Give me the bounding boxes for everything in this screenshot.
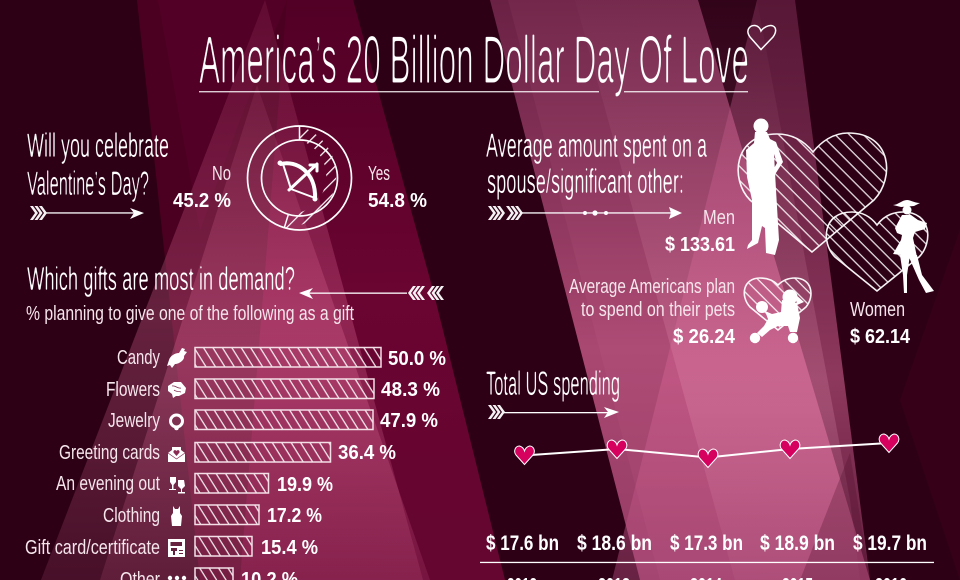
no value: No	[212, 163, 231, 185]
heading: average spend: spouse/significant other:	[487, 163, 684, 201]
arrow: celebrate	[30, 206, 144, 220]
women value	[850, 299, 911, 348]
heading: gifts: Which gifts are most in demand?	[27, 260, 295, 297]
no value	[173, 163, 231, 212]
women value: Women	[850, 299, 905, 321]
row: gift card	[25, 536, 318, 559]
pets text: to spend on their pets	[581, 299, 735, 321]
donut chart	[248, 126, 352, 230]
row: jewelry: 47.9 %	[380, 410, 438, 432]
pets text	[569, 276, 736, 348]
heart: women	[826, 212, 928, 291]
panel: gifts in demand	[25, 260, 446, 580]
icon: bow and arrow	[278, 161, 317, 201]
yes value: 54.8 %	[368, 190, 427, 212]
row: jewelry	[108, 410, 438, 432]
subheading: gifts: % planning to give one of the following as a gift	[26, 303, 354, 325]
panel: average spend	[486, 118, 934, 348]
heading: celebrate question: Will you celebrate	[27, 127, 169, 165]
row: greeting cards: Greeting cards	[59, 442, 160, 464]
women value: $ 62.14	[850, 326, 911, 348]
row: flowers	[106, 379, 440, 401]
year labels	[507, 575, 907, 580]
heading: average spend: Average amount spent on a	[486, 127, 707, 165]
men value	[665, 207, 735, 256]
row: gift card: Gift card/certificate	[25, 537, 160, 559]
line chart	[515, 434, 899, 468]
icon: man silhouette	[746, 118, 783, 255]
pets text: $ 26.24	[673, 326, 736, 348]
row: candy	[117, 347, 446, 370]
spending values	[486, 532, 927, 555]
spending values: $ 17.3 bn	[670, 532, 743, 555]
heading: celebrate question: Valentine’s Day?	[27, 165, 149, 203]
spending values: $ 18.6 bn	[577, 532, 652, 555]
men value: $ 133.61	[665, 234, 735, 256]
yes value	[368, 163, 427, 212]
row: flowers: 48.3 %	[381, 379, 440, 401]
row: flowers: Flowers	[106, 379, 160, 401]
row: clothing: 17.2 %	[267, 505, 322, 527]
heading: celebrate question	[27, 127, 169, 203]
yes value: Yes	[368, 163, 390, 185]
no value: 45.2 %	[173, 190, 231, 212]
row: candy: Candy	[117, 347, 160, 369]
arrow: total spending	[488, 405, 619, 419]
panel: will you celebrate	[27, 126, 427, 230]
row: jewelry: Jewelry	[108, 410, 160, 432]
pets text: Average Americans plan	[569, 276, 735, 298]
row: greeting cards	[59, 442, 396, 464]
row: gift card: 15.4 %	[261, 537, 318, 559]
row: clothing: Clothing	[103, 505, 160, 527]
row: candy: 50.0 %	[388, 348, 446, 370]
row: greeting cards: 36.4 %	[338, 442, 396, 464]
heading: average spend	[486, 127, 707, 201]
spending values: $ 18.9 bn	[760, 532, 835, 555]
spending values: $ 17.6 bn	[486, 532, 559, 555]
icon: poodle silhouette	[750, 290, 804, 343]
arrow: average spend	[488, 206, 682, 220]
arrow: gifts	[299, 286, 444, 300]
men value: Men	[703, 207, 735, 229]
panel: total US spending	[480, 365, 934, 580]
spending values: $ 19.7 bn	[853, 532, 927, 555]
heart: men	[738, 133, 887, 252]
heart: pets	[744, 278, 811, 330]
panel: total US spending: Total US spending	[486, 365, 620, 403]
row: clothing	[103, 505, 322, 527]
row: other	[120, 568, 298, 580]
icon: woman silhouette	[893, 200, 934, 293]
row: an evening out: 19.9 %	[277, 474, 333, 496]
row: an evening out: An evening out	[56, 473, 160, 495]
icon: title heart	[748, 25, 776, 50]
row: an evening out	[56, 473, 333, 496]
